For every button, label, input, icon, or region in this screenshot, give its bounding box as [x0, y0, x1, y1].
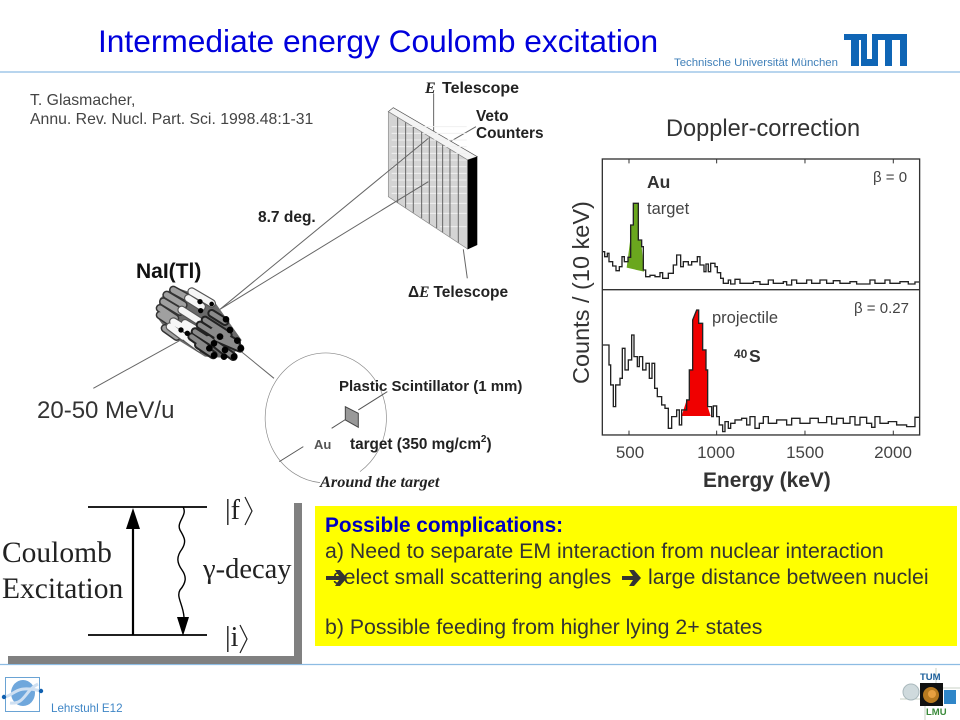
target label: Au [314, 437, 331, 452]
NaI label: NaI(Tl) [136, 260, 201, 283]
LMU mark: LMU [926, 707, 947, 718]
target label: 2 [481, 434, 487, 445]
callout line a consequence [326, 565, 929, 589]
heading: Doppler-correction: Doppler-correction [666, 116, 860, 142]
scattered beam lines [220, 138, 428, 309]
veto counters label: Counters [476, 125, 544, 142]
label: Lehrstuhl E12 [51, 702, 123, 715]
veto counters label: Veto [476, 108, 509, 125]
logos: partner institutions [900, 668, 960, 720]
icon: E12 emblem [2, 678, 43, 712]
icon: TUM wordmark [844, 34, 907, 66]
panel annotation: target: target [647, 200, 690, 218]
angle label: 8.7 deg. [258, 209, 316, 226]
detector setup diagram [37, 80, 544, 491]
callout line a consequence: select small scattering angles [333, 565, 611, 589]
x axis title: Energy (keV) [703, 469, 831, 492]
x axis ticks: 500 [616, 443, 644, 462]
panel annotation: 40S: S [749, 346, 761, 366]
beam and telescope lines [93, 93, 476, 388]
panel shadow [8, 503, 302, 664]
x axis ticks: 2000 [874, 443, 912, 462]
x axis ticks: 1500 [786, 443, 824, 462]
callout line a consequence: large distance between nuclei [648, 565, 929, 589]
delta E telescope label: Δ [408, 284, 419, 301]
energy levels [88, 507, 207, 635]
spectrum traces [602, 203, 920, 432]
callout line b: b) Possible feeding from higher lying 2+ states [325, 615, 762, 639]
citation: T. Glasmacher, [30, 92, 135, 109]
E telescope label: Telescope [442, 80, 519, 97]
telescope detector [388, 108, 477, 249]
text: initial state: |i [225, 622, 239, 653]
text: gamma decay: γ-decay [202, 554, 292, 585]
logo: Lehrstuhl E12 [2, 678, 123, 715]
gamma spectrum chart [568, 159, 920, 492]
callout line a: a) Need to separate EM interaction from nuclear interaction [325, 539, 884, 563]
arrow: gamma decay [177, 507, 189, 636]
panel annotation: Au: Au [647, 172, 670, 192]
callout: possible complications [315, 506, 957, 646]
arrow: excitation [126, 508, 140, 635]
x axis ticks: 1000 [697, 443, 735, 462]
target label: target (350 mg/cm [350, 436, 481, 453]
target close-up circle [265, 353, 386, 483]
scintillator label: Plastic Scintillator (1 mm) [339, 378, 522, 395]
panel annotation: beta 0: β = 0 [873, 169, 907, 186]
panel annotation: projectile: projectile [712, 309, 778, 327]
final state bracket [245, 497, 252, 525]
icon: blue emblem [944, 690, 956, 704]
university name: Technische Universität München [674, 57, 838, 69]
beam energy label: 20-50 MeV/u [37, 397, 174, 424]
delta E telescope label: E Telescope [419, 284, 508, 301]
target label: ) [486, 436, 492, 453]
red 40S peak [682, 310, 711, 416]
text: final state: |f [225, 495, 241, 526]
chart frame [602, 159, 920, 435]
text: Coulomb Excitation: Excitation [2, 573, 123, 605]
y axis title: Counts / (10 keV) [568, 201, 594, 384]
panel annotation: 40S: 40 [734, 347, 748, 361]
level scheme panel [2, 495, 302, 664]
citation: Annu. Rev. Nucl. Part. Sci. 1998.48:1-31 [30, 111, 314, 128]
E telescope label: E [424, 80, 436, 97]
logo: TUM header [674, 34, 907, 69]
around the target caption: Around the target [319, 472, 440, 491]
green Au peak [627, 203, 644, 272]
NaI(Tl) detector array [157, 287, 244, 360]
callout heading: Possible complications: [325, 514, 563, 537]
TUM mini wordmark: TUM [920, 672, 941, 683]
initial state bracket [240, 625, 247, 653]
text: Coulomb Excitation: Coulomb [2, 537, 112, 569]
panel annotation: beta 0.27: β = 0.27 [854, 300, 909, 317]
icon: seal [903, 684, 919, 700]
plastic scintillator [345, 407, 358, 427]
icon: central image [920, 683, 943, 706]
title: Intermediate energy Coulomb excitation [98, 23, 658, 59]
